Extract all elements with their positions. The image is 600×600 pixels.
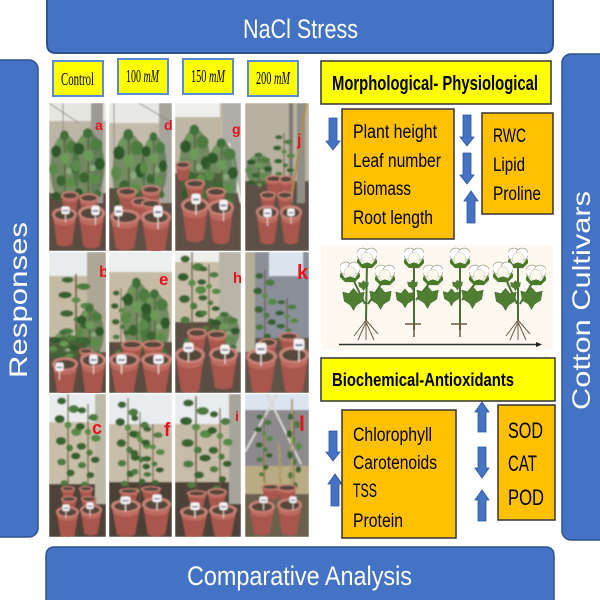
header bar: NaCl Stress: NaCl Stress — [243, 14, 358, 44]
treatment label: 150 mM: 150 mM — [191, 66, 226, 86]
heading: Biochemical-Antioxidants — [321, 358, 555, 401]
photo c: control plants: c — [92, 418, 102, 438]
photo l: 200 mM plants — [245, 394, 309, 537]
cotton plant 3 — [443, 248, 490, 337]
panel: biochemical traits: Carotenoids — [353, 453, 437, 474]
icon: lipid down arrow — [460, 153, 474, 184]
panel: morphological traits — [342, 109, 454, 239]
heading: Morphological- Physiological — [321, 61, 551, 104]
photo i: 150 mM plants: i — [235, 408, 239, 424]
cotton plant 4 — [492, 248, 547, 340]
photo l: 200 mM plants: l — [299, 413, 305, 436]
icon: proline up arrow — [464, 191, 478, 223]
photo k: 200 mM plants: k — [297, 262, 309, 284]
icon: POD up arrow — [475, 490, 489, 521]
photo g: 150 mM plants: g — [232, 121, 241, 137]
cotton plant 1 — [339, 248, 396, 340]
treatment label: Control — [53, 61, 103, 96]
photo j: 200 mM plants — [245, 103, 309, 251]
heading: Biochemical-Antioxidants: Biochemical-Antioxidants — [332, 370, 514, 390]
photo e: 100 mM plants: e — [159, 270, 168, 289]
photo h: 150 mM plants — [175, 252, 242, 393]
bottom bar: Comparative Analysis: Comparative Analysis — [187, 561, 412, 591]
photo k: 200 mM plants — [245, 252, 309, 393]
right bar: Cotton Cultivars — [562, 54, 600, 540]
illustration: cotton plants with growth arrow — [321, 245, 553, 350]
treatment label: 100 mM: 100 mM — [126, 66, 160, 86]
panel: biochemical traits — [342, 410, 456, 538]
panel: biochemical traits: Protein — [353, 511, 403, 532]
panel: morphological traits: Root length — [353, 208, 433, 229]
treatment label: 150 mM — [183, 59, 233, 94]
right bar: Cotton Cultivars: Cotton Cultivars — [568, 191, 596, 410]
panel: physiological traits: Lipid — [493, 155, 525, 176]
bottom bar: Comparative Analysis — [46, 547, 554, 600]
panel: biochemical traits: TSS — [353, 481, 377, 502]
photo g: 150 mM plants — [175, 103, 241, 251]
icon: RWC down arrow — [460, 115, 474, 146]
photo i: 150 mM plants — [175, 394, 241, 537]
cotton plant 2 — [396, 248, 444, 337]
photo b: control plants: b — [99, 264, 109, 281]
icon: TSS up arrow — [328, 474, 342, 506]
photo a: control plants: a — [95, 117, 103, 133]
icon: chlorophyll down arrow — [326, 431, 340, 461]
icon: SOD up arrow — [475, 402, 489, 432]
panel: antioxidants: POD — [508, 485, 544, 510]
panel: physiological traits — [482, 113, 553, 214]
photo f: 100 mM plants — [109, 394, 172, 537]
photo d: 100 mM plants: d — [164, 117, 173, 133]
panel: physiological traits: Proline — [493, 184, 541, 205]
icon: CAT down arrow — [475, 447, 489, 478]
icon: down arrow for morphological traits — [326, 118, 340, 150]
photo j: 200 mM plants: j — [296, 132, 301, 149]
treatment label: 200 mM: 200 mM — [256, 68, 291, 88]
panel: biochemical traits: Chlorophyll — [353, 425, 432, 446]
photo f: 100 mM plants: f — [164, 420, 171, 441]
panel: antioxidants — [498, 405, 555, 520]
header bar: NaCl Stress — [47, 0, 553, 53]
treatment label: Control: Control — [61, 69, 94, 89]
panel: morphological traits: Leaf number — [353, 151, 442, 172]
left bar: Responses — [0, 60, 38, 537]
photo b: control plants — [49, 252, 109, 393]
treatment label: 200 mM — [248, 61, 298, 96]
photo a: control plants — [49, 103, 106, 251]
panel: morphological traits: Plant height — [353, 122, 438, 143]
photo d: 100 mM plants — [109, 103, 173, 251]
left bar: Responses: Responses — [5, 222, 33, 378]
panel: antioxidants: SOD — [508, 418, 543, 443]
panel: physiological traits: RWC — [493, 126, 526, 147]
panel: antioxidants: CAT — [508, 451, 537, 476]
photo c: control plants — [49, 394, 106, 537]
treatment label: 100 mM — [118, 59, 168, 94]
photo e: 100 mM plants — [109, 252, 172, 393]
panel: morphological traits: Biomass — [353, 179, 411, 200]
photo h: 150 mM plants: h — [233, 270, 242, 287]
